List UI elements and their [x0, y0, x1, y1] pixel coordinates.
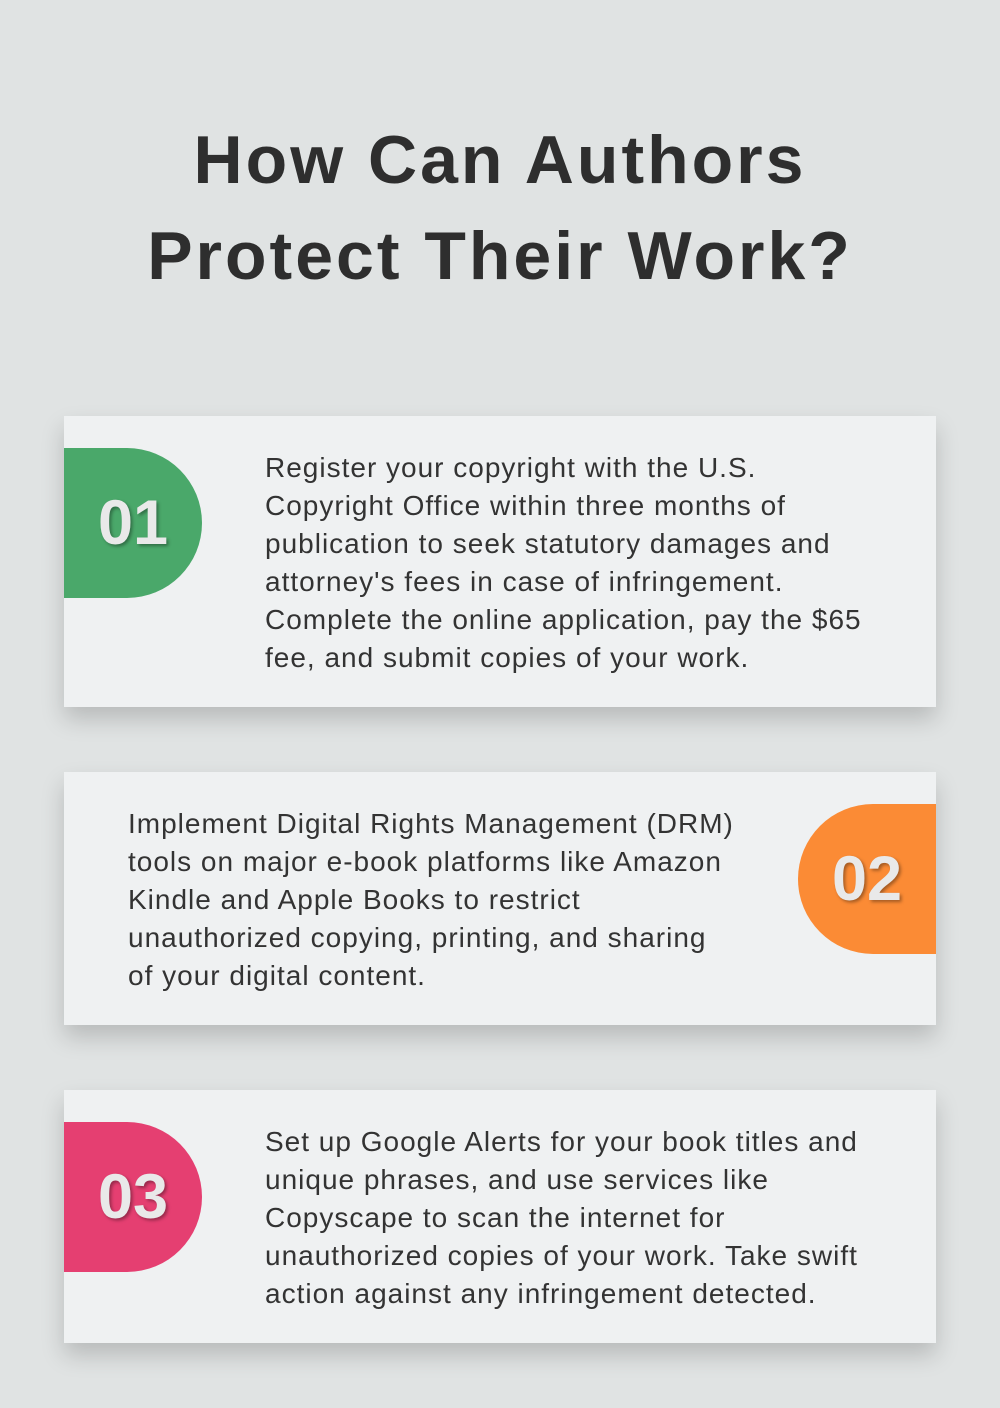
- badge: 02: [798, 804, 936, 954]
- text block: step 01: publication to seek statutory damages and: [265, 528, 831, 559]
- text block: step 01: Copyright Office within three months of: [265, 490, 786, 521]
- title: How Can Authors: [194, 122, 806, 198]
- text block: step 01: Register your copyright with the U.S.: [265, 452, 756, 483]
- text block: step 02: unauthorized copying, printing, and sharing: [128, 922, 706, 953]
- text block: step 01: attorney's fees in case of infringement.: [265, 566, 784, 597]
- text block: step 02: of your digital content.: [128, 960, 426, 991]
- badge: 03: [64, 1122, 202, 1272]
- text block: step 03: [265, 1126, 858, 1309]
- badge: 02: 02: [832, 844, 902, 914]
- text block: step 02: Implement Digital Rights Management (DRM): [128, 808, 734, 839]
- badge: 03: 03: [98, 1162, 168, 1232]
- text block: step 03: unauthorized copies of your work. Take swift: [265, 1240, 858, 1271]
- badge: 01: [64, 448, 202, 598]
- text block: step 02: tools on major e-book platforms like Amazon: [128, 846, 722, 877]
- title: [147, 122, 853, 294]
- text block: step 02: [128, 808, 734, 991]
- title: Protect Their Work?: [147, 218, 853, 294]
- text block: step 01: Complete the online application, pay the $65: [265, 604, 862, 635]
- badge: 01: 01: [98, 488, 168, 558]
- text block: step 03: Set up Google Alerts for your book titles and: [265, 1126, 858, 1157]
- panel: step 02: [64, 772, 936, 1025]
- text block: step 03: unique phrases, and use services like: [265, 1164, 769, 1195]
- text block: step 03: action against any infringement detected.: [265, 1278, 817, 1309]
- panel: step 01: [64, 416, 936, 707]
- text block: step 01: [265, 452, 862, 673]
- text block: step 01: fee, and submit copies of your work.: [265, 642, 749, 673]
- text block: step 03: Copyscape to scan the internet for: [265, 1202, 725, 1233]
- text block: step 02: Kindle and Apple Books to restrict: [128, 884, 581, 915]
- panel: step 03: [64, 1090, 936, 1343]
